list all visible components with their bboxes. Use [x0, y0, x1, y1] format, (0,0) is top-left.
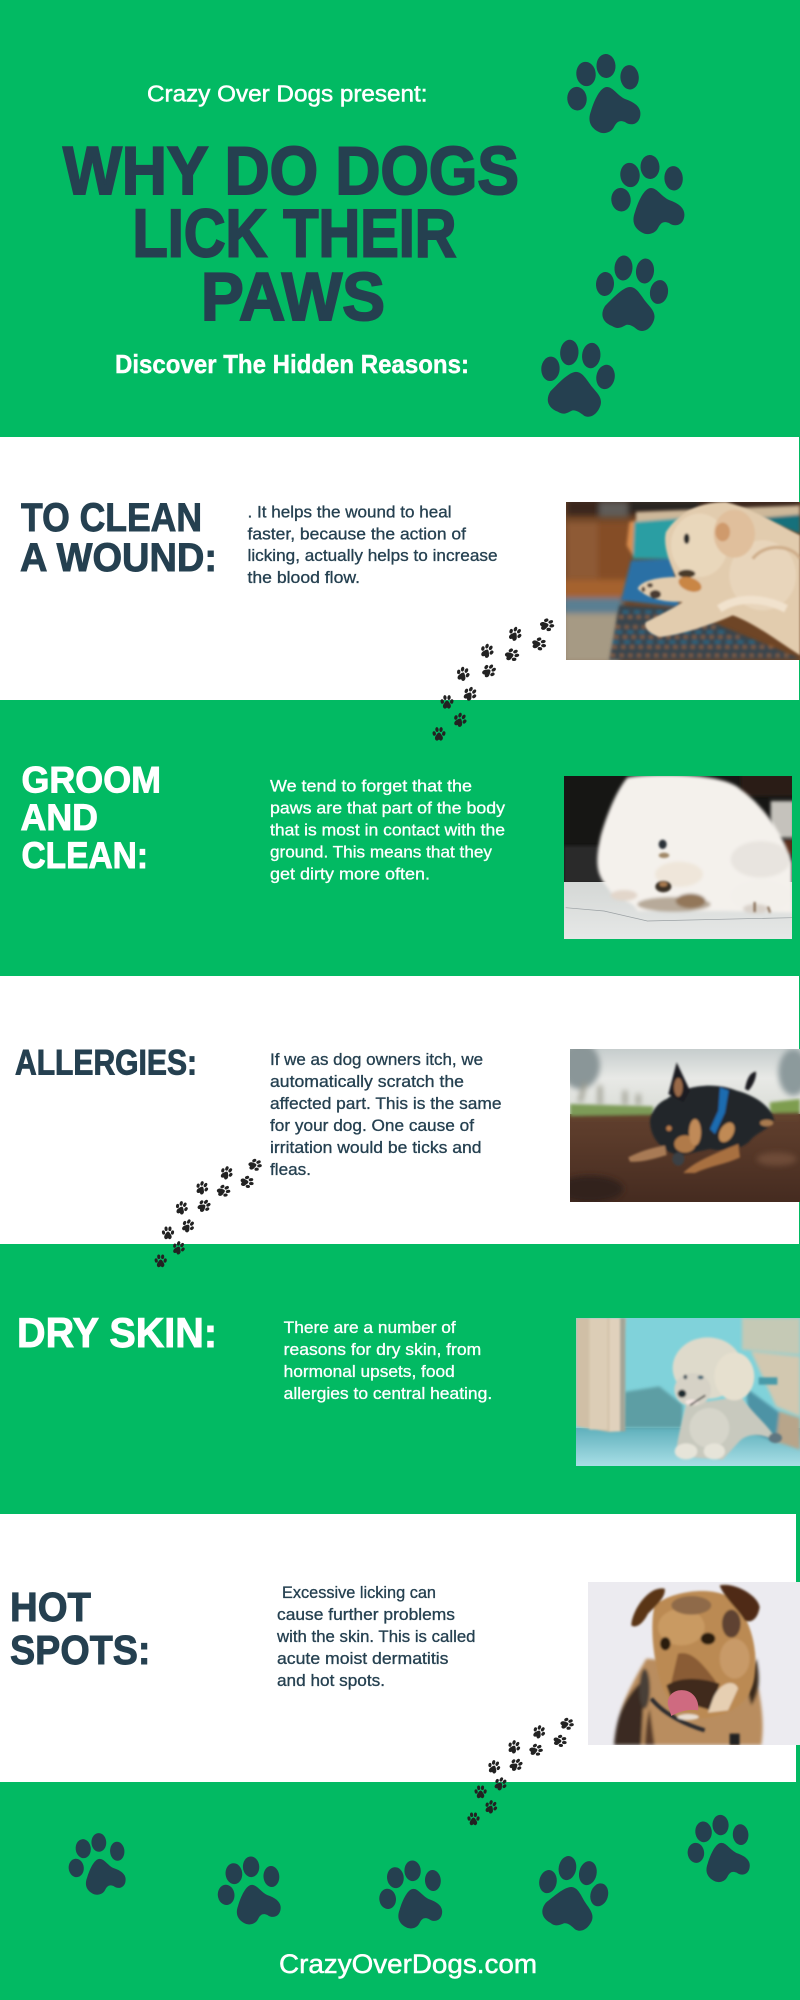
panel: to clean a wound — [0, 437, 800, 700]
icon: footer paw prints — [68, 1814, 750, 1934]
text block — [248, 504, 498, 587]
panel: footer — [0, 1782, 800, 2000]
photo: curly dog on rug — [566, 502, 800, 660]
heading: GROOM — [22, 760, 161, 800]
title: WHY DO DOGS — [63, 133, 519, 209]
text block: with the skin. This is called — [276, 1628, 476, 1646]
heading — [20, 760, 161, 876]
text block: hormonal upsets, food — [284, 1363, 455, 1381]
heading: SPOTS: — [10, 1627, 150, 1673]
photo: white poodle — [576, 1318, 800, 1466]
subtitle: Discover The Hidden Reasons: — [115, 349, 469, 379]
heading: AND — [20, 797, 98, 838]
text block: acute moist dermatitis — [277, 1650, 448, 1668]
heading — [10, 1584, 150, 1673]
icon: paw trail three — [467, 1716, 575, 1825]
text block — [270, 777, 506, 883]
icon: tongue — [668, 1690, 698, 1716]
text block: Excessive licking can — [282, 1584, 436, 1602]
text block: There are a number of — [284, 1319, 456, 1337]
text block: If we as dog owners itch, we — [270, 1051, 483, 1069]
photo: black and tan dog — [570, 1049, 800, 1202]
text block: fleas. — [270, 1161, 311, 1179]
photo: dog licking nose — [588, 1582, 800, 1745]
text block: irritation would be ticks and — [270, 1139, 482, 1157]
text block: ground. This means that they — [270, 844, 493, 862]
text block: licking, actually helps to increase — [248, 547, 498, 565]
heading: A WOUND: — [20, 536, 217, 580]
icon: header paw prints — [540, 54, 684, 417]
text block: allergies to central heating. — [284, 1385, 492, 1403]
heading: ALLERGIES: — [15, 1044, 197, 1083]
text block: reasons for dry skin, from — [284, 1341, 481, 1359]
title: PAWS — [201, 259, 385, 335]
text block: and hot spots. — [277, 1672, 385, 1690]
title — [63, 133, 519, 335]
text block: automatically scratch the — [270, 1073, 464, 1091]
icon: paw trail one — [432, 617, 556, 741]
heading: DRY SKIN: — [17, 1309, 217, 1356]
heading — [20, 496, 217, 580]
website: CrazyOverDogs.com — [279, 1949, 537, 1979]
text block: that is most in contact with the — [270, 821, 505, 839]
photo: white dog — [564, 776, 792, 939]
text block — [276, 1584, 476, 1690]
heading: HOT — [10, 1584, 91, 1630]
panel: groom and clean — [0, 700, 800, 976]
text block: . It helps the wound to heal — [248, 504, 452, 522]
text block: the blood flow. — [248, 569, 360, 587]
text block: for your dog. One cause of — [270, 1117, 474, 1135]
text block — [284, 1319, 492, 1403]
text block: get dirty more often. — [270, 865, 430, 883]
panel: dry skin — [0, 1244, 800, 1514]
heading: CLEAN: — [22, 835, 148, 876]
panel: hot spots — [0, 1514, 800, 1782]
presenter line: Crazy Over Dogs present: — [147, 80, 428, 106]
icon: paw trail two — [154, 1157, 263, 1267]
text block: We tend to forget that the — [270, 777, 472, 795]
text block: cause further problems — [277, 1606, 455, 1624]
text block: paws are that part of the body — [270, 800, 506, 818]
panel: allergies — [0, 976, 800, 1244]
text block: faster, because the action of — [248, 525, 466, 543]
text block — [270, 1051, 502, 1179]
heading: TO CLEAN — [21, 496, 202, 540]
panel: header — [0, 0, 800, 437]
text block: affected part. This is the same — [270, 1095, 502, 1113]
title: LICK THEIR — [132, 196, 456, 272]
